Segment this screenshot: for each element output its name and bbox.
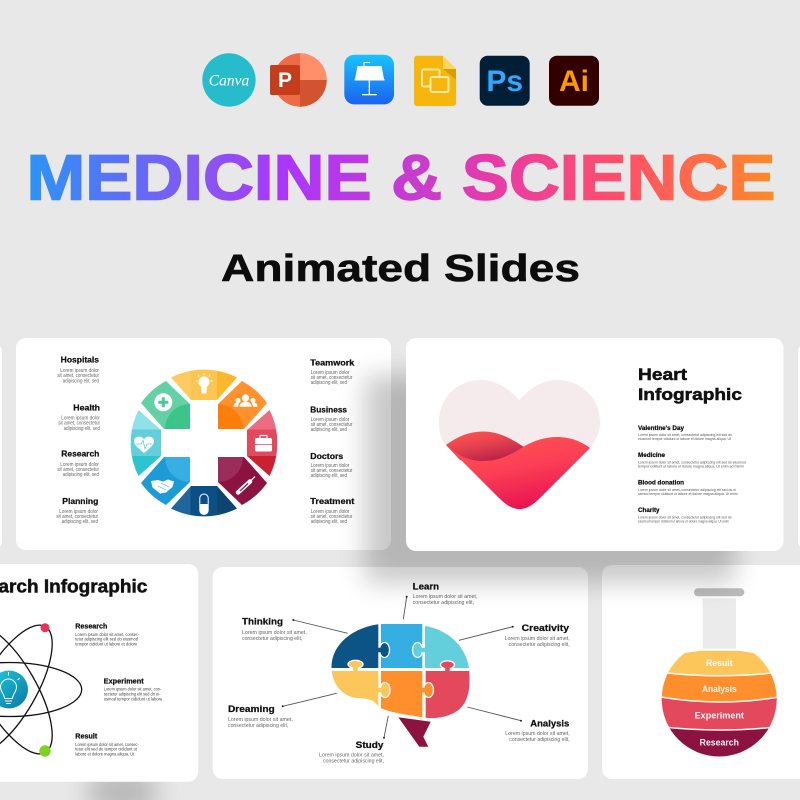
label: dreaming: [228, 704, 293, 729]
label: treatment: adipiscing elit, sed: [311, 519, 347, 525]
label: learn: Learn: [413, 581, 439, 591]
label: creativity: Creativity: [522, 623, 569, 633]
label: treatment: [310, 496, 354, 525]
brain puzzle: [331, 624, 470, 747]
item: medicine: [638, 452, 746, 469]
label: planning: Lorem ipsum dolor: [59, 509, 98, 515]
icon row: supported apps: [202, 53, 599, 107]
label: teamwork: sit amet, consectetur: [311, 375, 353, 381]
label: study: Study: [356, 740, 383, 750]
label: business: adipiscing elit, sed: [311, 427, 347, 433]
flask body: [662, 650, 777, 756]
item: medicine: tempor cididunt ut labore et dolore magna aliqua. Ut enim ad minim: [638, 465, 744, 469]
item: valentine's day: [638, 425, 732, 441]
label: creativity: consectetur adipiscing elit,: [509, 642, 570, 648]
label: research: [75, 623, 140, 647]
icon: Photoshop: [480, 56, 530, 106]
card shadow from the heart slide: [365, 375, 735, 583]
segment: briefcase: [247, 410, 277, 476]
atom diagram: [0, 613, 82, 766]
panel: brain infographic: [213, 567, 588, 779]
panel: flask infographic: [602, 565, 800, 779]
segment: pill: [171, 486, 237, 516]
label: result: tetur elit sed do tempor cididunt ut: [75, 747, 138, 752]
item: charity: Charity: [638, 507, 660, 514]
icon: Google Slides: [414, 56, 456, 106]
label: experiment: Lorem ipsum dolor sit amet, con-: [104, 687, 162, 692]
heading: heart infographic: Heart: [638, 366, 688, 384]
label: result: Result: [75, 734, 98, 741]
label: planning: Planning: [62, 496, 98, 506]
label: creativity: [505, 623, 570, 648]
label: learn: [413, 581, 477, 606]
panel: cross wheel infographic: [16, 338, 391, 550]
item: blood donation: [638, 479, 738, 496]
label: study: consectetur adipiscing elit,: [323, 758, 384, 764]
heading: heart infographic: [638, 366, 742, 404]
item: blood donation: Lorem ipsum dolor sit amet, consectetur adipiscing elit sed do ei: [638, 488, 736, 492]
label: teamwork: Teamwork: [310, 357, 355, 367]
label: research: adipiscing elit, sed: [63, 472, 99, 478]
wheel diagram: [131, 370, 277, 516]
flask neck: [703, 598, 736, 649]
item: valentine's day: Valentine's Day: [638, 425, 684, 432]
label: analysis: [505, 719, 570, 743]
flask labels: Analysis: [702, 684, 737, 695]
item: charity: eiusmod tempor cididunt ut labore et dolore magna aliqua. Ut enim: [638, 519, 729, 523]
heart chart: [439, 380, 600, 509]
segment: people: [218, 381, 267, 429]
label: dreaming: Dreaming: [228, 704, 275, 714]
icon: Canva: Canva: [209, 72, 249, 90]
label: study: Lorem ipsum dolor sit amet,: [319, 752, 384, 758]
item: medicine: Medicine: [638, 452, 665, 459]
title: MEDICINE & SCIENCE: [26, 141, 775, 213]
label: study: [319, 740, 384, 764]
segment: bulb: [171, 370, 237, 400]
flask cap: [694, 588, 744, 596]
label: health: Lorem ipsum dolor: [61, 416, 100, 422]
label: experiment: sectetur adipiscing elit sed do ei-: [104, 691, 161, 696]
label: hospitals: Lorem ipsum dolor: [60, 368, 99, 374]
label: planning: adipiscing elit, sed: [62, 519, 98, 525]
label: learn: Lorem ipsum dolor sit amet,: [413, 594, 477, 600]
label: hospitals: [57, 355, 99, 384]
label: doctors: Doctors: [310, 451, 344, 461]
label: doctors: [310, 451, 353, 479]
label: research: Research: [75, 623, 107, 630]
label: thinking: [242, 616, 307, 642]
label: research: Lorem ipsum dolor: [60, 462, 99, 468]
label: hospitals: sit amet, consectetur: [57, 373, 99, 379]
leader lines: [282, 596, 522, 739]
label: health: [58, 403, 100, 432]
item: medicine: Lorem ipsum dolor sit amet, consectetur adipiscing elit sed do eiusmod: [638, 461, 746, 465]
edge slide slivers: [0, 345, 800, 548]
label: teamwork: adipiscing elit, sed: [311, 380, 347, 386]
icon: Illustrator: Ai: [559, 65, 589, 98]
segment: handshake: [141, 457, 190, 505]
item: valentine's day: eiusmod tempor cididunt ut labore et dolore magna aliqua. Ut: [638, 437, 731, 441]
item: charity: Lorem ipsum dolor sit amet, consectetur adipiscing elit sed do: [638, 516, 732, 520]
flask labels: Experiment: [695, 711, 745, 722]
icon: Canva: [202, 53, 256, 107]
label: hospitals: Hospitals: [61, 355, 99, 365]
segment: thermometer: [218, 457, 267, 505]
label: experiment: Experiment: [104, 678, 144, 685]
label: planning: sit amet, consectetur: [56, 514, 98, 520]
label: thinking: Lorem ipsum dolor sit amet,: [242, 630, 307, 636]
label: research: Lorem ipsum dolor sit amet, consec-: [75, 632, 140, 637]
label: analysis: Analysis: [530, 719, 569, 729]
icon: PowerPoint: P: [278, 69, 292, 92]
label: doctors: sit amet, consectetur: [311, 468, 353, 474]
item: blood donation: usmod tempor cididunt ut labore et dolore magna aliqua. Ut enim: [638, 492, 738, 496]
shadow under research slide: [90, 770, 155, 800]
panel: research infographic: [0, 564, 198, 782]
label: health: Health: [73, 403, 100, 413]
label: dreaming: Lorem ipsum dolor sit amet,: [228, 717, 293, 723]
label: research: tetur adipiscing elit sed do eiusmod: [75, 637, 138, 642]
heading: heart infographic: Infographic: [638, 386, 742, 404]
icon: PowerPoint: [270, 53, 327, 107]
label: experiment: usmod tempor cididunt ut labore: [104, 696, 163, 701]
label: learn: consectetur adipiscing elit,: [413, 600, 474, 606]
label: dreaming: consectetur adipiscing elit,: [228, 723, 288, 729]
label: research: [57, 449, 99, 478]
label: business: Business: [310, 405, 347, 415]
flask labels: Result: [706, 658, 733, 669]
label: experiment: [104, 678, 163, 701]
label: teamwork: [310, 357, 355, 386]
label: teamwork: Lorem ipsum dolor: [311, 370, 350, 376]
item: valentine's day: Lorem ipsum dolor sit amet, consectetur adipiscing elit sed do: [638, 433, 732, 437]
label: research: tempor cididunt ut labore et dolore: [75, 642, 138, 647]
icon: Photoshop: Ps: [486, 65, 523, 98]
label: treatment: Lorem ipsum dolor: [311, 509, 350, 515]
label: research: Research: [61, 449, 99, 459]
label: planning: [56, 496, 98, 525]
label: creativity: Lorem ipsum dolor sit amet,: [505, 636, 570, 642]
item: charity: [638, 507, 732, 523]
subtitle: Animated Slides: [221, 248, 580, 290]
label: treatment: sit amet, consectetur: [311, 514, 353, 520]
label: health: adipiscing elit, sed: [64, 426, 100, 432]
item: blood donation: Blood donation: [638, 479, 684, 486]
label: research: sit amet, consectetur: [57, 467, 99, 473]
segment: heart: [131, 410, 161, 476]
label: treatment: Treatment: [310, 496, 354, 506]
label: analysis: consectetur adipiscing elit,: [509, 737, 570, 743]
panel: heart infographic: [406, 338, 784, 551]
label: result: labore et dolore magna aliqua. Ut: [75, 752, 135, 757]
label: doctors: adipiscing elit, sed: [311, 473, 347, 479]
icon: Illustrator: [549, 56, 599, 106]
flask labels: [695, 658, 745, 748]
label: business: sit amet, consectetur: [311, 422, 353, 428]
label: result: [75, 734, 139, 757]
label: thinking: Thinking: [242, 616, 283, 626]
icon: Keynote: [344, 55, 394, 104]
label: doctors: Lorem ipsum dolor: [311, 463, 350, 469]
label: business: Lorem ipsum dolor: [311, 417, 350, 423]
label: business: [310, 405, 353, 433]
label: analysis: Lorem ipsum dolor sit amet,: [505, 731, 570, 737]
label: thinking: consectetur adipiscing elit,: [242, 636, 302, 642]
flask labels: Research: [700, 737, 739, 748]
label: result: Lorem ipsum dolor sit amet, consec-: [75, 742, 139, 747]
segment: plus: [141, 381, 190, 429]
label: health: sit amet, consectetur: [58, 420, 100, 426]
label: hospitals: adipiscing elit, sed: [63, 378, 99, 384]
